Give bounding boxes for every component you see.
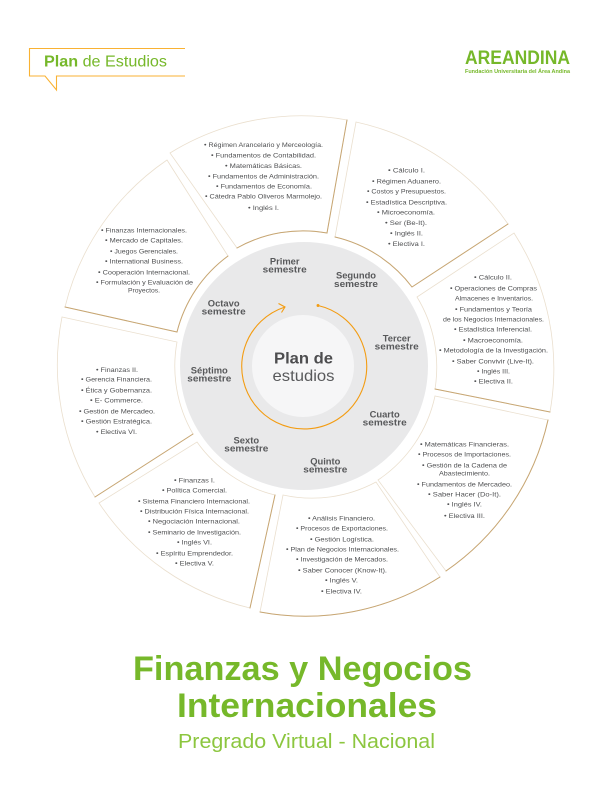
semester labels: semestre [263, 264, 307, 274]
panel: cuarto semestre subjects [378, 396, 548, 571]
semester labels: Sexto [234, 434, 259, 445]
semester labels: Cuarto [370, 408, 400, 419]
panel: cuarto semestre subjects: Abastecimiento. [439, 470, 490, 477]
panel: sexto semestre subjects: • Finanzas I. [174, 478, 215, 485]
logo: Areandina: AREANDINA [465, 48, 570, 69]
panel: segundo semestre subjects: • Cálculo I. [388, 168, 425, 175]
panel: primer semestre subjects: • Régimen Arancelario y Merceología. [204, 142, 323, 149]
panel: sexto semestre subjects: • Sistema Financiero Internacional. [138, 499, 250, 506]
semester labels: semestre [375, 341, 419, 352]
panel: sexto semestre subjects: • Seminario de Investigación. [148, 530, 241, 537]
panel: septimo semestre subjects: • E- Commerce. [90, 398, 143, 405]
panel: tercer semestre subjects: Almacenes e Inventarios. [455, 296, 533, 303]
panel: sexto semestre subjects: • Inglés VI. [177, 540, 212, 547]
panel: tercer semestre subjects: • Fundamentos y Teoría [455, 307, 532, 314]
panel: quinto semestre subjects: • Procesos de Exportaciones. [296, 526, 388, 533]
panel: segundo semestre subjects: • Inglés II. [390, 231, 423, 238]
title [133, 650, 472, 725]
panel: tercer semestre subjects: • Inglés III. [477, 369, 510, 376]
panel: septimo semestre subjects: • Gestión Estratégica. [81, 419, 152, 426]
semester labels: Quinto [310, 455, 341, 466]
panel: quinto semestre subjects: • Inglés V. [325, 578, 358, 585]
panel: primer semestre subjects: • Cátedra Pablo Oliveros Marmolejo. [205, 194, 322, 200]
panel: tercer semestre subjects: • Macroeconomía. [463, 337, 523, 344]
semester labels: semestre [334, 278, 378, 289]
panel: segundo semestre subjects: • Régimen Aduanero. [372, 179, 441, 186]
semester labels: semestre [187, 373, 231, 384]
panel: tercer semestre subjects: de los Negocios Internacionales. [443, 316, 544, 323]
panel: octavo semestre subjects: • Formulación y Evaluación de [96, 280, 193, 287]
panel: septimo semestre subjects: • Gestión de Mercadeo. [79, 409, 155, 416]
panel: cuarto semestre subjects: • Gestión de la Cadena de [422, 463, 507, 470]
semester labels: Tercer [383, 332, 411, 343]
panel: octavo semestre subjects: • Juegos Gerenciales. [110, 249, 178, 256]
panel: quinto semestre subjects: • Saber Conocer (Know-It). [298, 568, 387, 575]
panel: octavo semestre subjects: Proyectos. [128, 288, 160, 295]
center circle: Plan de estudios: estudios [272, 368, 334, 385]
panel: cuarto semestre subjects: • Fundamentos de Mercadeo. [417, 482, 512, 489]
panel: tercer semestre subjects [417, 233, 554, 412]
panel: septimo semestre subjects: • Electiva VI. [96, 429, 137, 436]
panel: septimo semestre subjects: • Ética y Gobernanza. [81, 386, 152, 395]
panel: octavo semestre subjects: • Mercado de Capitales. [105, 238, 183, 245]
panel: sexto semestre subjects: • Electiva V. [175, 561, 214, 568]
arrow: circular cycle [242, 304, 367, 429]
panel: sexto semestre subjects: • Negociación Internacional. [148, 519, 240, 526]
panel: primer semestre subjects: • Fundamentos de Economía. [216, 184, 312, 190]
title: Internacionales [177, 687, 437, 725]
panel: primer semestre subjects: • Fundamentos de Contabilidad. [211, 152, 316, 160]
panel: segundo semestre subjects: • Costos y Presupuestos. [367, 189, 446, 196]
panel: segundo semestre subjects: • Estadística Descriptiva. [366, 200, 447, 207]
panel: octavo semestre subjects: • Finanzas Internacionales. [101, 228, 187, 235]
panel: octavo semestre subjects: • Cooperación Internacional. [98, 270, 190, 277]
logo: Areandina: Fundación Universitaria del Área Andina [465, 68, 570, 75]
title: Finanzas y Negocios [133, 650, 472, 688]
panel: sexto semestre subjects [99, 442, 275, 608]
panel: septimo semestre subjects: • Gerencia Financiera. [81, 377, 152, 384]
panel: septimo semestre subjects: • Finanzas II. [96, 367, 138, 374]
semester labels: Séptimo [191, 364, 228, 375]
panel: octavo semestre subjects [65, 160, 228, 332]
panel: octavo semestre subjects: • International Business. [105, 259, 183, 266]
panel: cuarto semestre subjects: • Inglés IV. [447, 502, 482, 509]
panel: sexto semestre subjects: • Política Comercial. [162, 488, 227, 495]
panel: cuarto semestre subjects: • Electiva III. [444, 513, 485, 520]
panel: tercer semestre subjects: • Metodología de la Investigación. [439, 347, 548, 354]
semester labels: Segundo [336, 270, 376, 281]
panel: cuarto semestre subjects: • Procesos de Importaciones. [418, 451, 511, 458]
panel: quinto semestre subjects: • Electiva IV. [321, 589, 362, 596]
panel: primer semestre subjects: • Matemáticas Básicas. [225, 163, 302, 170]
center circle: Plan de estudios: Plan de [274, 350, 333, 368]
panel: quinto semestre subjects: • Plan de Negocios Internacionales. [286, 547, 399, 554]
center circle: Plan de estudios [252, 315, 354, 417]
panel: cuarto semestre subjects: • Saber Hacer (Do-It). [428, 492, 501, 499]
panel: segundo semestre subjects: • Microeconomía. [377, 210, 435, 217]
panel: quinto semestre subjects: • Gestión Logística. [310, 537, 374, 544]
panel: segundo semestre subjects [335, 122, 508, 287]
panel: quinto semestre subjects: • Investigación de Mercados. [296, 557, 388, 564]
panel: quinto semestre subjects: • Análisis Financiero. [308, 516, 375, 523]
panel: segundo semestre subjects: • Electiva I. [388, 241, 425, 248]
semester labels: semestre [303, 464, 347, 475]
panel: primer semestre subjects: • Fundamentos de Administración. [208, 174, 319, 181]
semester labels: semestre [224, 443, 268, 454]
semester labels: Octavo [208, 297, 240, 308]
panel: tercer semestre subjects: • Electiva II. [474, 379, 513, 386]
panel: tercer semestre subjects: • Estadística Inferencial. [454, 326, 532, 333]
panel: primer semestre subjects [170, 116, 347, 248]
header callout: Plan de Estudios: Plan de Estudios [44, 54, 167, 71]
panel: primer semestre subjects: • Inglés I. [248, 205, 279, 212]
subtitle: Pregrado Virtual - Nacional [178, 731, 435, 753]
central gray disc [180, 242, 428, 490]
panel: tercer semestre subjects: • Cálculo II. [474, 274, 512, 281]
semester labels [187, 255, 419, 475]
panel: segundo semestre subjects: • Ser (Be-It). [385, 220, 427, 227]
semester labels: Primer [270, 255, 300, 266]
panel: quinto semestre subjects [260, 482, 440, 616]
semester labels: semestre [363, 417, 407, 428]
semester labels: semestre [202, 306, 246, 317]
panel: septimo semestre subjects [57, 317, 193, 497]
panel: cuarto semestre subjects: • Matemáticas Financieras. [420, 442, 509, 449]
header callout: Plan de Estudios [30, 48, 185, 90]
panel: tercer semestre subjects: • Operaciones de Compras [450, 286, 538, 293]
panel: sexto semestre subjects: • Espíritu Emprendedor. [156, 551, 233, 558]
panel: sexto semestre subjects: • Distribución Física Internacional. [140, 509, 249, 516]
panel: tercer semestre subjects: • Saber Convivir (Live-It). [452, 358, 534, 365]
